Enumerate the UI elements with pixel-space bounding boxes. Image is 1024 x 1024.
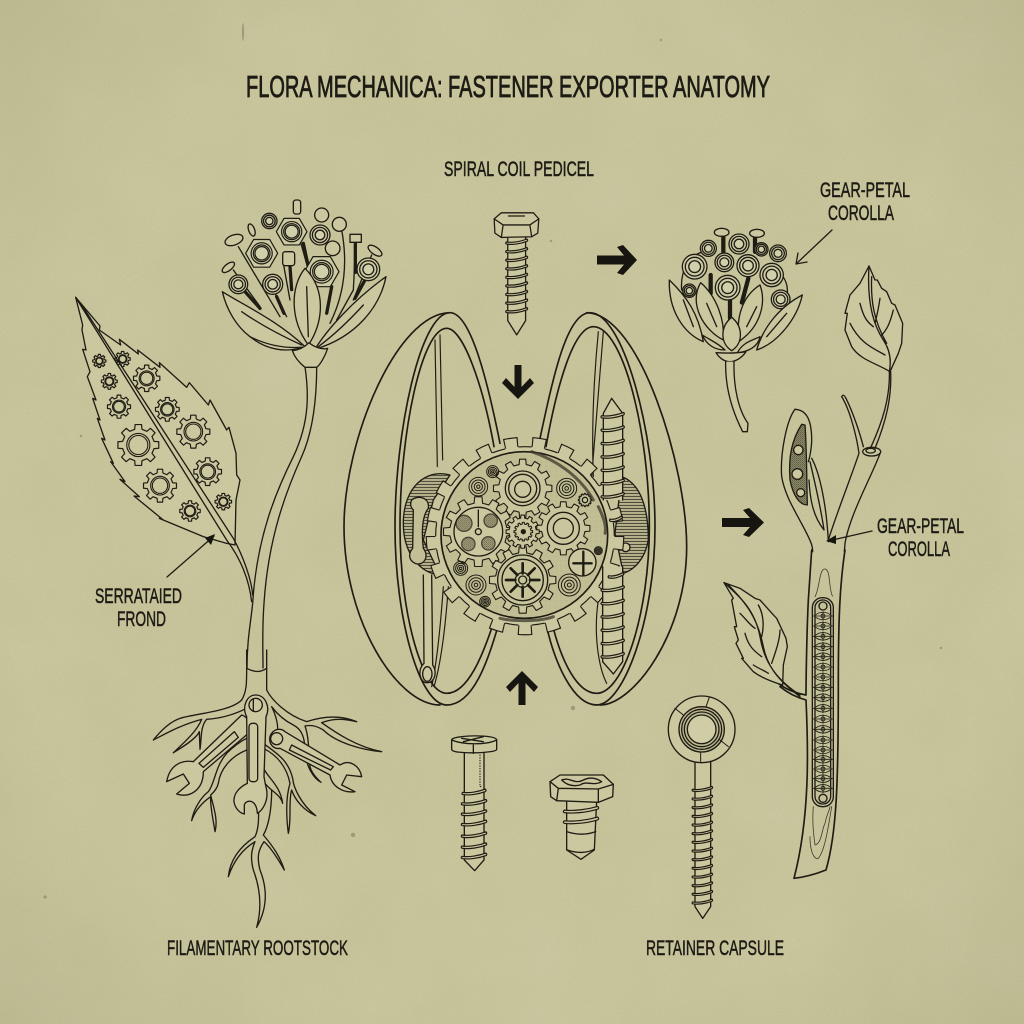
callout arrow: serrated frond [167,536,214,577]
lower stem with capsule and leaf [724,550,845,878]
left flowering plant [76,200,386,668]
callout arrowhead [205,534,215,545]
arrow: up into gear [506,671,538,705]
plant stem [247,367,317,668]
label: gear-petal corolla upper: COROLLA [828,202,894,225]
icon: eye screw retainer capsule [668,696,735,918]
label: spiral coil pedicel: SPIRAL COIL PEDICEL [444,158,594,181]
right drum [615,477,648,573]
callout arrowhead [826,535,836,544]
screw over gear [601,398,624,674]
serrated leaf [76,297,253,602]
icon: short bolt [550,775,613,859]
center wrench [234,695,268,814]
callout arrow: upper corolla [796,230,832,264]
right wrench [270,729,362,792]
flower petals [669,280,802,432]
outer gear ring [431,442,619,630]
arrow: down into gear [502,365,534,399]
flower petals and calyx [222,268,386,367]
root system [153,650,382,927]
label: gear-petal corolla lower [877,515,964,561]
small flower cutaway [669,228,903,552]
flower head [681,228,790,320]
flower head of fasteners [221,200,384,323]
left wrench [167,715,250,795]
branch and bud [781,372,891,552]
label: serrated frond: FROND [117,608,166,631]
arrow: right to branch [722,508,764,537]
wood grain [810,569,833,859]
label: retainer capsule: RETAINER CAPSULE [646,937,784,960]
icon: lower fasteners [452,696,735,918]
lower leaf [724,583,800,697]
label: gear-petal corolla lower: GEAR-PETAL [877,515,964,538]
label: serrated frond [95,585,182,631]
right egg frame [540,313,687,705]
label: serrated frond: SERRATAIED [95,585,182,608]
label: gear-petal corolla upper [820,179,910,225]
gear train [444,452,605,621]
icon: long screw [452,736,497,871]
roots with wrenches [153,650,382,927]
stem outline [778,550,845,878]
icon: top screw [494,213,539,335]
label: gear-petal corolla upper: GEAR-PETAL [820,179,910,202]
upper leaf [845,266,903,372]
left egg frame [344,313,500,705]
capsule chain [812,598,833,807]
label: gear-petal corolla lower: COROLLA [888,538,950,561]
callout arrow: lower corolla [828,531,872,541]
left drum with wrench [403,474,450,683]
label: filamentary rootstock: FILAMENTARY ROOTSTOCK [167,937,348,960]
central mechanism [344,313,687,705]
arrow: to small flower [597,245,637,275]
